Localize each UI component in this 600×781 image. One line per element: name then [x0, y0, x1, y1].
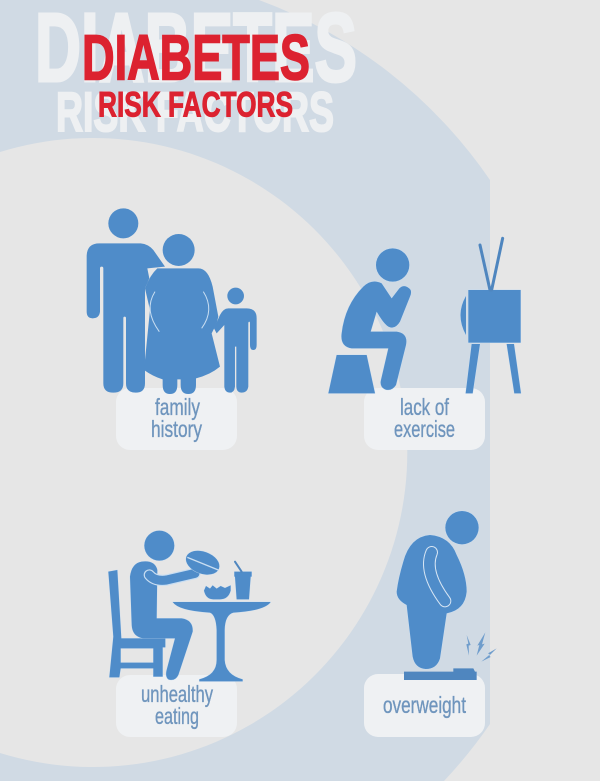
- label: overweight: [364, 674, 485, 737]
- main title: DIABETES: [82, 22, 310, 94]
- main title: RISK FACTORS: [98, 86, 293, 124]
- panel: family history: [87, 208, 257, 450]
- panel: overweight: [364, 511, 497, 737]
- label: unhealthy eating: [116, 675, 237, 737]
- label: family history: family: [155, 394, 200, 420]
- label: family history: history: [151, 416, 202, 442]
- label: unhealthy eating: eating: [155, 703, 199, 729]
- label: lack of exercise: [364, 388, 485, 450]
- label: lack of exercise: exercise: [394, 416, 455, 442]
- icon: family: [87, 208, 257, 394]
- label: unhealthy eating: unhealthy: [141, 681, 213, 707]
- main title: [82, 22, 310, 124]
- panel: lack of exercise: [328, 238, 521, 450]
- label: family history: [116, 388, 237, 450]
- title block: [35, 0, 357, 143]
- icon: person eating at table: [108, 531, 271, 681]
- panel: unhealthy eating: [108, 531, 271, 737]
- label: lack of exercise: lack of: [400, 394, 449, 420]
- icon: overweight person on scale: [397, 511, 497, 680]
- ghost title: RISK FACTORS: [56, 80, 334, 143]
- label: overweight: overweight: [383, 692, 466, 718]
- icon: person watching tv: [328, 238, 521, 393]
- ghost title: [35, 0, 357, 143]
